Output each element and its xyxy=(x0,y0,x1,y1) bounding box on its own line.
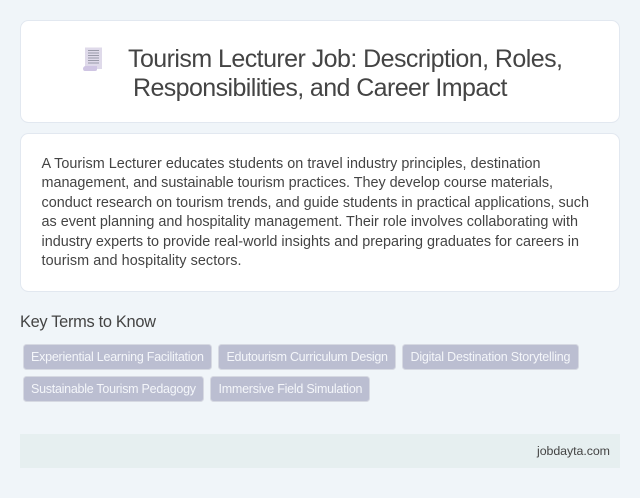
tag: digital storytelling xyxy=(402,344,578,370)
text block: description: as event planning and hospitality management. Their role involves collaborating with xyxy=(42,214,578,230)
text block: description xyxy=(42,156,589,269)
tag: sustainable pedagogy xyxy=(24,376,204,402)
tag: experiential learning xyxy=(24,344,212,370)
text block: description: management, and sustainable tourism practices. They develop course materials, xyxy=(42,175,553,191)
tag: immersive simulation xyxy=(210,376,370,402)
tag: edutourism xyxy=(218,344,396,370)
heading: Responsibilities, and Career Impact xyxy=(133,74,508,102)
heading xyxy=(128,45,563,102)
text block: description: A Tourism Lecturer educates students on travel industry principles, destination xyxy=(42,156,540,172)
tag: immersive simulation: Immersive Field Simulation xyxy=(218,382,363,396)
tag: experiential learning: Experiential Learning Facilitation xyxy=(31,350,204,364)
tag: sustainable pedagogy: Sustainable Tourism Pedagogy xyxy=(31,382,197,396)
footer bar xyxy=(20,434,620,468)
tag list xyxy=(24,344,578,402)
heading: Tourism Lecturer Job: Description, Roles, xyxy=(128,45,563,73)
panel: title card xyxy=(20,20,620,122)
footer source: jobdayta.com xyxy=(536,444,610,458)
text block: description: tourism and hospitality sectors. xyxy=(42,253,242,269)
heading: key terms: Key Terms to Know xyxy=(20,313,156,331)
tag: digital storytelling: Digital Destination Storytelling xyxy=(410,350,571,364)
text block: description: conduct research on tourism trends, and guide students in practical applications, such xyxy=(42,195,589,211)
tag: edutourism: Edutourism Curriculum Design xyxy=(226,350,388,364)
panel: description xyxy=(20,134,620,292)
text block: description: industry experts to provide real-world insights and preparing graduates for careers in xyxy=(42,234,579,250)
icon: document scroll xyxy=(83,48,102,71)
